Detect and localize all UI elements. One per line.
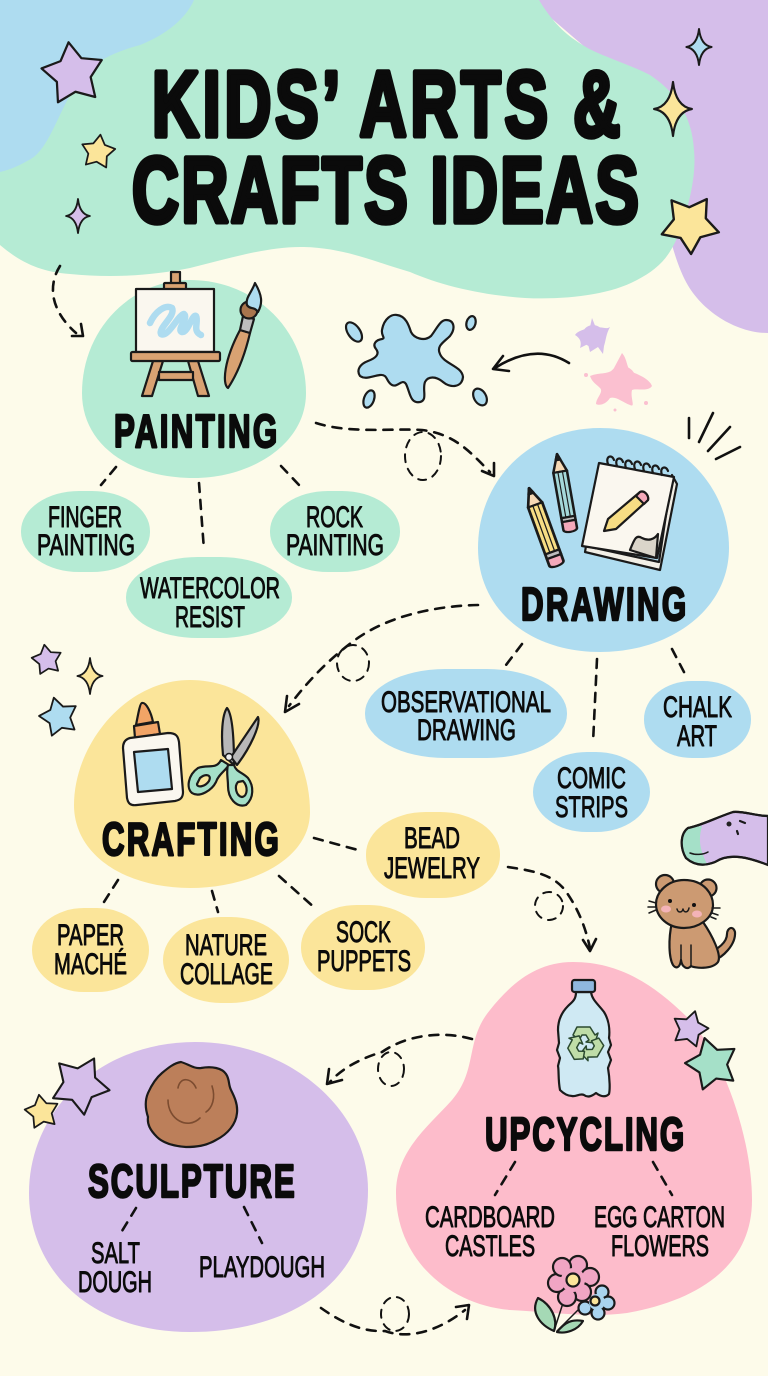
panel: sculpture [23,1042,368,1332]
sub-item: finger painting: PAINTING [37,529,135,562]
decorative stars: upcycling [668,1009,744,1098]
panel: drawing [365,413,751,832]
sub-item: chalk art: ART [677,720,717,753]
sub-item: egg carton flowers: FLOWERS [611,1230,709,1263]
panel: painting [21,272,400,638]
crafting blob [74,680,310,888]
sub-item: sock puppets: PUPPETS [317,945,411,978]
icon: yellow pencil [522,485,564,569]
arrow: sculpture to upcycling [321,1297,469,1334]
panel: crafting [32,680,500,1003]
sub-item: nature collage: NATURE [185,929,267,962]
arrow: header to painting [53,266,83,336]
sub-item: rock painting [270,491,400,572]
sub-item: paper mache: PAPER [57,919,124,952]
icon: glue bottle [123,703,183,805]
sub-item: finger painting: FINGER [48,501,122,534]
icon: purple paint splat [575,318,610,354]
branch dashes: upcycling [495,1162,672,1195]
sub-item: rock painting: PAINTING [286,529,384,562]
title: CRAFTS IDEAS [132,139,639,243]
icon: burst lines [689,413,740,459]
icon: pink paint splat [584,353,652,412]
heading: crafting: CRAFTING [102,814,279,866]
sub-item: playdough: PLAYDOUGH [199,1251,325,1284]
background blob: green header [0,0,694,298]
heading: sculpture: SCULPTURE [88,1156,295,1208]
sub-item: comic strips: COMIC [557,762,626,795]
title: KIDS’ ARTS & [152,53,620,157]
decorative stars: crafting [30,642,103,738]
icon: plastic bottle [557,980,611,1096]
branch dashes: sculpture [122,1207,262,1243]
icon: clay lump [146,1062,237,1147]
sub-item: egg carton flowers [594,1201,725,1263]
drawing blob [478,428,729,652]
icon: teal pencil [550,453,578,533]
icon: notepad [582,457,677,570]
sub-item: chalk art [644,681,751,758]
decorative stars: header [38,29,720,255]
decorative stars: sculpture [23,1057,112,1129]
sub-item: observational drawing [365,669,567,758]
sub-item: chalk art: CHALK [663,691,732,724]
sub-item: paper mache: MACHÉ [54,948,127,981]
heading: drawing: DRAWING [521,579,686,631]
sub-item: nature collage: COLLAGE [180,958,273,991]
sculpture blob [29,1042,368,1332]
sub-item: cardboard castles [425,1201,555,1263]
sub-item: salt dough: DOUGH [78,1266,152,1299]
icon: paintbrush [225,283,261,388]
icon: cat [648,875,735,968]
sub-item: watercolor resist: WATERCOLOR [140,572,280,605]
branch dashes: crafting [104,838,358,912]
arrow: painting to drawing [316,423,494,480]
sub-item: finger painting [21,491,150,572]
sub-item: sock puppets [301,905,425,990]
arrow: drawing to crafting [285,605,478,712]
branch dashes: drawing [506,644,685,743]
sub-item: sock puppets: SOCK [336,916,391,949]
arrow: upcycling to sculpture [327,1035,472,1086]
painting blob [82,280,306,478]
icon: blue paint splat [343,315,490,409]
sub-item: bead jewelry: JEWELRY [384,852,480,885]
sub-item: bead jewelry: BEAD [404,822,460,855]
sub-item: nature collage [163,917,289,1003]
sub-item: rock painting: ROCK [306,501,363,534]
sub-item: watercolor resist: RESIST [175,601,245,634]
sub-item: paper mache [32,908,149,992]
icon: flowers [535,1256,614,1333]
sub-item: comic strips [533,752,650,832]
icon: sock puppet [682,812,768,865]
panel: upcycling [396,962,752,1333]
sub-item: watercolor resist [126,557,292,638]
sub-item: bead jewelry [366,812,500,898]
sub-item: salt dough: SALT [91,1237,140,1270]
background blob: purple top right [530,0,768,333]
branch dashes: painting [101,466,300,550]
title [132,53,639,243]
background blob: blue top left [0,0,200,190]
sub-item: comic strips: STRIPS [555,791,628,824]
sub-item: cardboard castles: CASTLES [445,1230,535,1263]
upcycling blob [396,962,752,1315]
sub-item: observational drawing: DRAWING [417,714,516,747]
sub-item: salt dough [78,1237,152,1299]
heading: painting: PAINTING [114,406,277,458]
arrow: pink splat to blue splat [493,354,569,371]
sub-item: observational drawing: OBSERVATIONAL [381,686,551,719]
arrow: crafting to upcycling [508,867,596,951]
icon: easel [131,272,220,396]
sub-item: cardboard castles: CARDBOARD [425,1201,555,1234]
icon: recycling symbol [564,1027,606,1064]
icon: scissors [189,708,258,806]
heading: upcycling: UPCYCLING [485,1109,684,1161]
